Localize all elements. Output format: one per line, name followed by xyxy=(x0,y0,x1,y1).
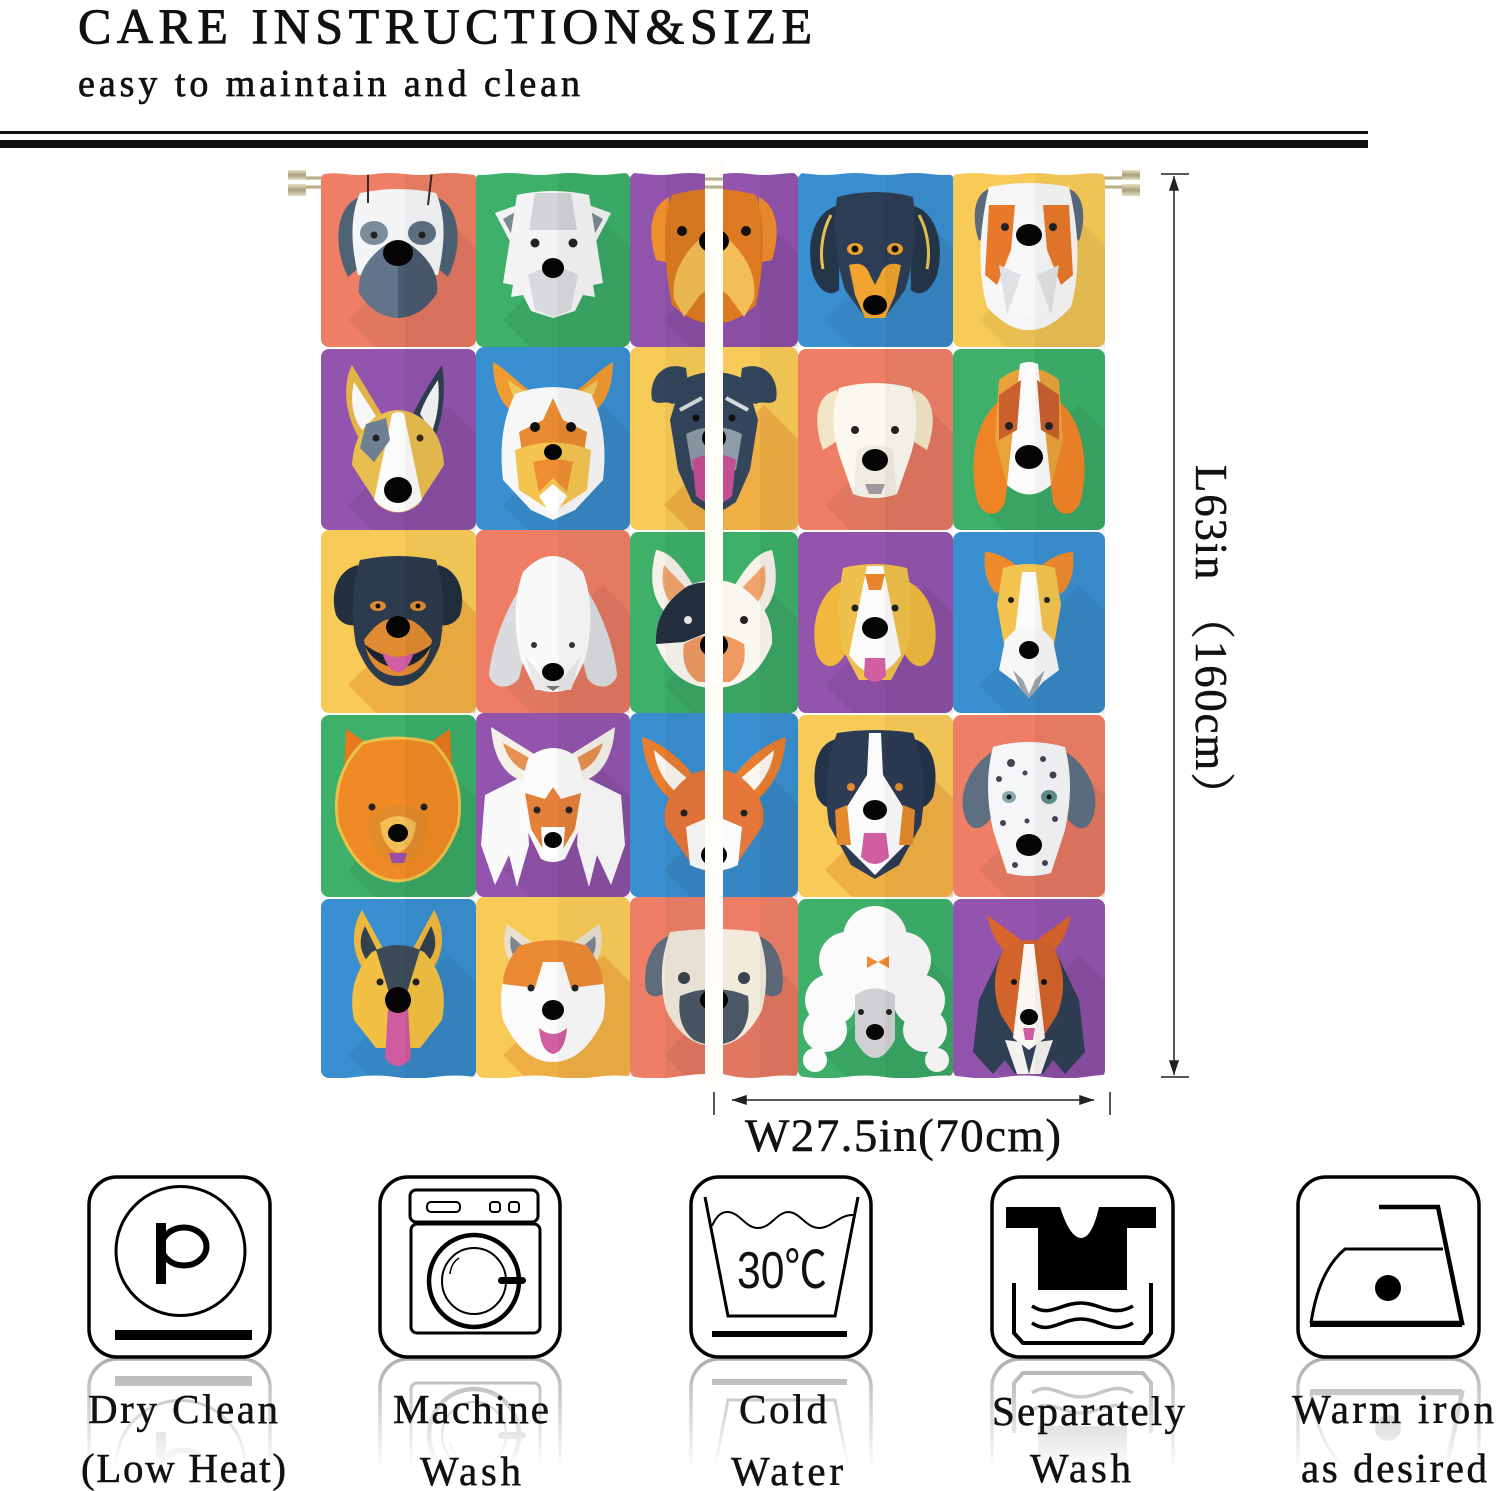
label: cold water xyxy=(731,1386,843,1491)
dog: akita xyxy=(501,924,843,1295)
tile: yellow bernese xyxy=(798,715,953,897)
label: separately wash: Separately xyxy=(992,1388,1186,1434)
icon: separately wash xyxy=(992,1177,1173,1357)
rod centre section xyxy=(705,177,723,189)
tile: purple beagle xyxy=(798,532,953,713)
dog: labrador xyxy=(817,383,1165,745)
label: warm iron xyxy=(1292,1386,1494,1491)
height dimension arrow xyxy=(1161,174,1189,1077)
reflections of care icons xyxy=(87,1358,1481,1458)
tile: blue fox terrier xyxy=(953,532,1105,713)
curtain rod xyxy=(288,170,1140,196)
icon: dry clean xyxy=(89,1177,270,1357)
curtain centre gap xyxy=(705,160,723,1085)
tile: coral bedlington xyxy=(476,530,630,713)
label: machine wash: Machine xyxy=(393,1386,549,1432)
dog: schnauzer xyxy=(651,366,1004,745)
curtain ruffled top edge xyxy=(315,160,1110,175)
tile: yellow st bernard xyxy=(953,173,1105,347)
tile: green westie xyxy=(476,173,630,347)
tile: green poodle xyxy=(798,899,953,1078)
dog: poodle xyxy=(803,906,1165,1295)
icon: machine wash xyxy=(380,1177,560,1357)
dog: chihuahua xyxy=(642,737,1004,1110)
dog: st bernard xyxy=(975,183,1319,560)
icon: cold water basin: 30℃ xyxy=(737,1242,827,1300)
label: dry clean: (Low Heat) xyxy=(81,1445,286,1491)
tile: yellow akita xyxy=(476,897,630,1078)
dog: dalmatian xyxy=(963,742,1319,1110)
height label: L63in （160cm） xyxy=(1186,465,1236,817)
tile: purple mastiff split xyxy=(630,173,798,347)
label: warm iron: as desired xyxy=(1301,1445,1487,1491)
dog: chinese crested xyxy=(481,727,843,1110)
curtain wavy hem xyxy=(315,1074,1110,1090)
icon: warm iron xyxy=(1298,1177,1479,1357)
width dimension arrow xyxy=(714,1092,1110,1115)
dog: german shepherd xyxy=(348,910,688,1295)
tile: coral dalmatian xyxy=(953,715,1105,897)
tile: yellow rottweiler xyxy=(321,530,476,713)
dog: westie xyxy=(495,191,843,560)
tile: blue german shepherd xyxy=(321,899,476,1078)
dog: french bulldog xyxy=(652,550,1004,925)
dog: bernese mountain dog xyxy=(814,730,1165,1110)
width label: W27.5in(70cm) xyxy=(745,1110,1061,1162)
tile: green french bulldog split xyxy=(630,532,798,713)
dog: bordeaux mastiff xyxy=(651,189,1004,560)
curtain pleat shading xyxy=(405,172,1105,1078)
label: separately wash: Wash xyxy=(1030,1445,1131,1491)
subtitle: easy to maintain and clean xyxy=(78,63,580,105)
icon: cold water basin xyxy=(691,1177,871,1357)
label: warm iron: Warm iron xyxy=(1292,1386,1494,1432)
label: dry clean xyxy=(81,1386,286,1491)
tile: coral pug split xyxy=(630,897,798,1078)
curtain illustration xyxy=(288,160,1319,1295)
dog: rottweiler xyxy=(334,556,688,925)
dog: chow chow xyxy=(336,729,688,1110)
tile: green basset xyxy=(953,349,1105,530)
tile: purple bull terrier xyxy=(321,349,476,530)
label: machine wash xyxy=(393,1386,549,1491)
dog: beagle xyxy=(814,564,1165,925)
dog: basset hound xyxy=(973,362,1319,745)
label: dry clean: Dry Clean xyxy=(88,1386,278,1432)
dog: pug xyxy=(645,929,1004,1295)
tile: blue chihuahua split xyxy=(630,713,798,897)
label: cold water: Cold xyxy=(739,1386,827,1432)
tile: coral labrador xyxy=(798,349,953,530)
tile: blue yorkie xyxy=(476,347,630,530)
tile: purple collie xyxy=(953,899,1105,1078)
tile: blue dachshund xyxy=(798,173,953,347)
dog: bull terrier xyxy=(346,365,688,745)
tile: coral mastiff xyxy=(321,173,476,347)
tile: purple chinese crested xyxy=(476,713,630,897)
label: separately wash xyxy=(992,1388,1186,1491)
tile: green chow xyxy=(321,715,476,897)
dog: wire fox terrier xyxy=(979,552,1319,925)
dog: dachshund xyxy=(810,192,1165,560)
dog: bedlington terrier xyxy=(489,556,843,925)
header rule xyxy=(0,131,1368,148)
dog: yorkie xyxy=(493,362,843,745)
tile: yellow schnauzer split xyxy=(630,347,798,530)
dog: mastiff xyxy=(338,171,688,560)
dog: rough collie xyxy=(973,915,1319,1295)
